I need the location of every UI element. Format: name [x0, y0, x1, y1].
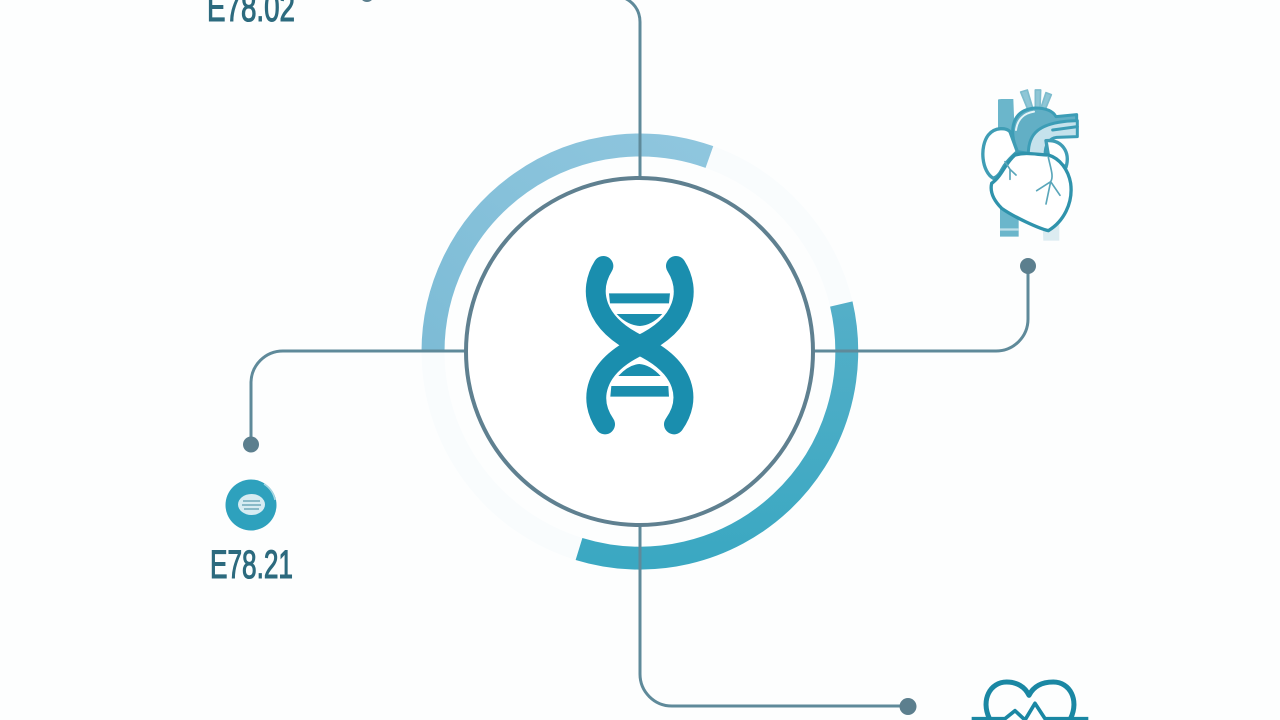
faint ring segments — [433, 157, 841, 549]
ventricles outline — [991, 154, 1071, 231]
connector: top — [622, 0, 640, 178]
right atrium — [983, 129, 1017, 178]
label: E78.21: E78.21 — [210, 543, 293, 587]
icon: DNA helix — [596, 266, 684, 424]
icon: metabolic disc — [226, 480, 276, 530]
connector: left — [243, 351, 466, 452]
pulmonary artery — [1028, 121, 1077, 156]
icon: anatomical heart — [983, 90, 1077, 241]
vessel behind heart — [998, 99, 1059, 241]
coronary vessels — [1005, 157, 1060, 204]
connector: bottom — [640, 525, 916, 715]
connector dot: top left — [360, 0, 374, 2]
aorta highlight — [1016, 112, 1034, 130]
branch arteries — [1021, 90, 1051, 110]
connector: right — [813, 258, 1036, 351]
arc: lower right progress ring — [579, 304, 847, 558]
arc: upper left progress ring — [433, 145, 709, 352]
central circle — [466, 178, 813, 525]
aorta arch — [1013, 108, 1077, 153]
icon: heart with pulse line — [972, 682, 1088, 720]
left atrium — [1046, 141, 1067, 167]
